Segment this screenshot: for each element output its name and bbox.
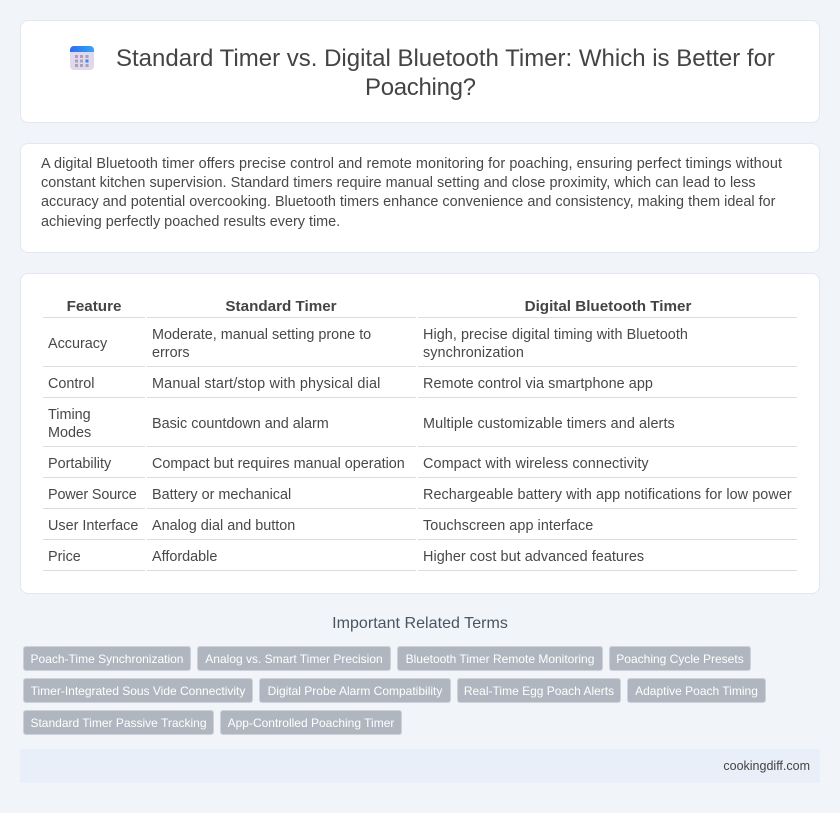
table header: Feature xyxy=(67,298,121,315)
table rows: synchronization xyxy=(423,345,524,361)
tag list: Analog vs. Smart Timer Precision xyxy=(205,652,383,666)
table rows: Remote control via smartphone app xyxy=(423,376,653,392)
icon: calendar timer xyxy=(70,46,94,70)
table rows: Compact but requires manual operation xyxy=(152,456,405,472)
tag list: Real-Time Egg Poach Alerts xyxy=(464,684,614,698)
table header: Standard Timer xyxy=(225,298,337,315)
table rows: Control xyxy=(48,376,94,392)
table rows: Portability xyxy=(48,456,111,472)
table rows: Touchscreen app interface xyxy=(423,518,593,534)
table rows: Accuracy xyxy=(48,336,107,352)
table rows: Power Source xyxy=(48,487,137,503)
title: Standard Timer vs. Digital Bluetooth Timer: Which is Better for xyxy=(116,45,775,72)
tag list: Timer-Integrated Sous Vide Connectivity xyxy=(31,684,245,698)
table rows: Compact with wireless connectivity xyxy=(423,456,649,472)
tag list: Bluetooth Timer Remote Monitoring xyxy=(406,652,594,666)
table rows: High, precise digital timing with Bluetooth xyxy=(423,327,688,343)
tag list: Adaptive Poach Timing xyxy=(635,684,758,698)
table rows: errors xyxy=(152,345,190,361)
table header xyxy=(67,298,692,315)
intro paragraph xyxy=(41,156,782,230)
intro paragraph: accuracy and potential overcooking. Bluetooth timers enhance convenience and consistency, making them ideal for xyxy=(41,194,775,210)
table rows: Analog dial and button xyxy=(152,518,295,534)
footer: cookingdiff.com xyxy=(723,759,810,773)
table rows: Basic countdown and alarm xyxy=(152,416,329,432)
table rows: Modes xyxy=(48,425,91,441)
intro paragraph: achieving perfectly poached results every time. xyxy=(41,214,340,230)
tag list xyxy=(23,646,766,735)
intro paragraph: A digital Bluetooth timer offers precise control and remote monitoring for poaching, ensuring perfect timings without xyxy=(41,156,782,172)
tag list: Digital Probe Alarm Compatibility xyxy=(268,684,442,698)
heading: related terms: Important Related Terms xyxy=(332,614,508,632)
tag list: Poach-Time Synchronization xyxy=(31,652,183,666)
tag list: App-Controlled Poaching Timer xyxy=(228,716,394,730)
intro paragraph: constant kitchen supervision. Standard timers require manual setting and close proximity, which can lead to less xyxy=(41,175,756,191)
table rows: Rechargeable battery with app notifications for low power xyxy=(423,487,792,503)
tag list: Poaching Cycle Presets xyxy=(616,652,744,666)
table rows xyxy=(43,317,797,571)
table rows: Multiple customizable timers and alerts xyxy=(423,416,675,432)
table rows: Manual start/stop with physical dial xyxy=(152,376,380,392)
title: Poaching? xyxy=(365,74,476,101)
tag list: Standard Timer Passive Tracking xyxy=(30,716,207,730)
table rows: Affordable xyxy=(152,549,217,565)
table rows: Higher cost but advanced features xyxy=(423,549,644,565)
panel: header xyxy=(20,20,820,123)
table rows: User Interface xyxy=(48,518,138,534)
panel: comparison table xyxy=(20,273,820,594)
panel: intro text xyxy=(20,143,820,253)
title xyxy=(116,45,775,101)
footer xyxy=(20,749,820,783)
table rows: Battery or mechanical xyxy=(152,487,291,503)
table rows: Moderate, manual setting prone to xyxy=(152,327,371,343)
table rows: Price xyxy=(48,549,81,565)
table header: Digital Bluetooth Timer xyxy=(525,298,691,315)
table rows: Timing xyxy=(48,407,91,423)
